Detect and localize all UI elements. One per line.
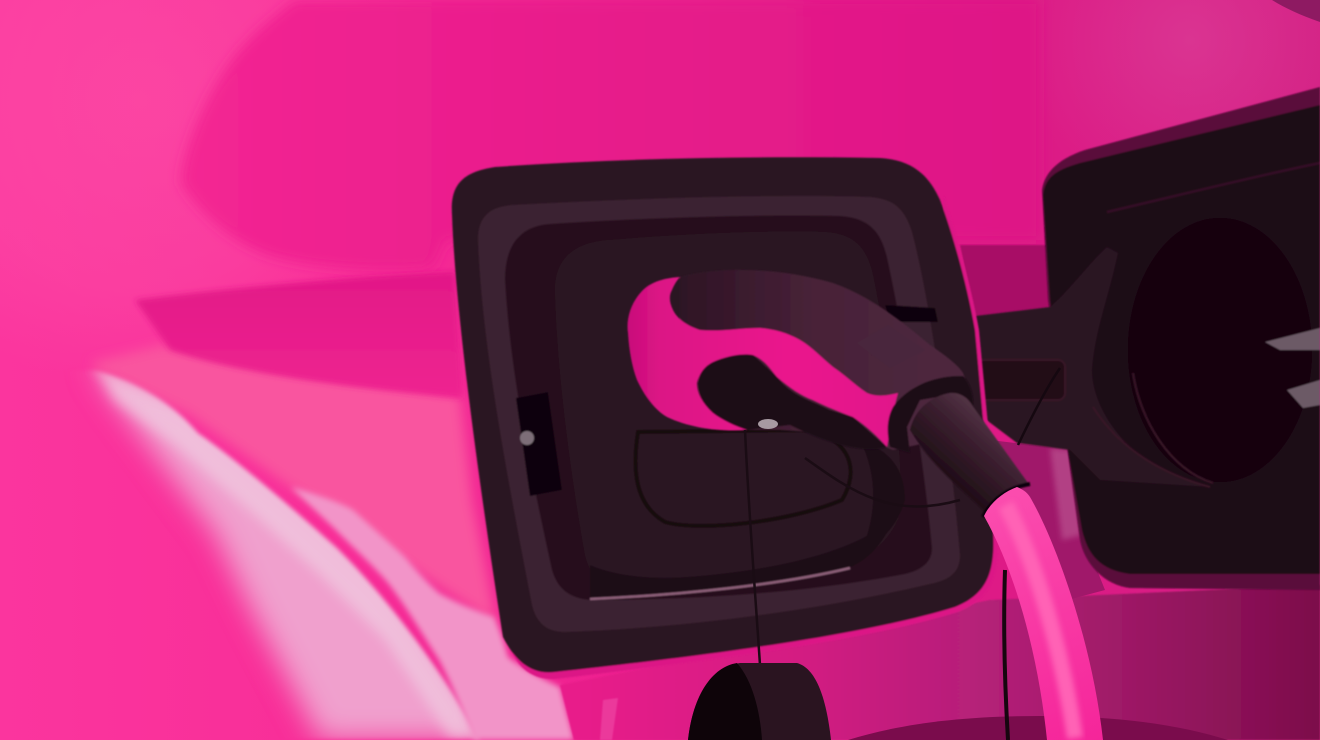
connector glint — [758, 419, 778, 429]
flap circular recess — [1128, 218, 1312, 482]
pink grip — [628, 277, 898, 447]
strain relief dark ring — [983, 484, 1030, 517]
handle label panel — [857, 325, 925, 368]
body crease right of port — [960, 245, 1052, 322]
grey metal contacts — [1265, 328, 1320, 350]
hinge arm curves — [1093, 373, 1213, 487]
hinge arm — [917, 247, 1210, 487]
port socket loop — [635, 430, 851, 526]
bottom dark edge — [848, 716, 1228, 740]
lighter body strip beside flap — [1050, 448, 1082, 540]
latch pin — [520, 431, 534, 445]
frame step — [478, 196, 960, 632]
hinge arm slot — [977, 360, 1065, 400]
top-right dark corner — [1272, 0, 1320, 22]
body panel shadow: upper — [181, 0, 1040, 270]
strain relief — [910, 393, 1028, 512]
frame recess — [505, 215, 932, 600]
port darker recess — [860, 440, 905, 555]
opening at top right — [885, 305, 938, 322]
white reflection on body — [90, 360, 574, 740]
lighter body area between crease and reflection — [94, 345, 497, 625]
frame glow edge — [510, 195, 998, 679]
body sheen under the port — [600, 698, 618, 740]
charge port frame — [452, 157, 998, 679]
port panel — [555, 231, 901, 588]
handle underside pocket — [698, 354, 887, 449]
handle shell — [680, 270, 972, 450]
second reflection patch — [291, 487, 574, 740]
recess highlight — [590, 568, 850, 599]
plug cap — [688, 663, 831, 740]
handle collar — [888, 376, 973, 453]
latch — [516, 392, 562, 496]
flap inner lines — [1107, 163, 1320, 212]
pink charging cable — [984, 487, 1103, 740]
charging handle — [628, 270, 1030, 517]
body crease shadow — [135, 272, 462, 398]
open charge flap door — [917, 87, 1320, 590]
recess lower shadow — [590, 520, 893, 598]
thin wires — [745, 368, 1060, 740]
frame outer rim — [452, 157, 993, 672]
lower body strip between arm and flap — [990, 440, 1105, 610]
lower body panel under the port — [560, 585, 1320, 740]
